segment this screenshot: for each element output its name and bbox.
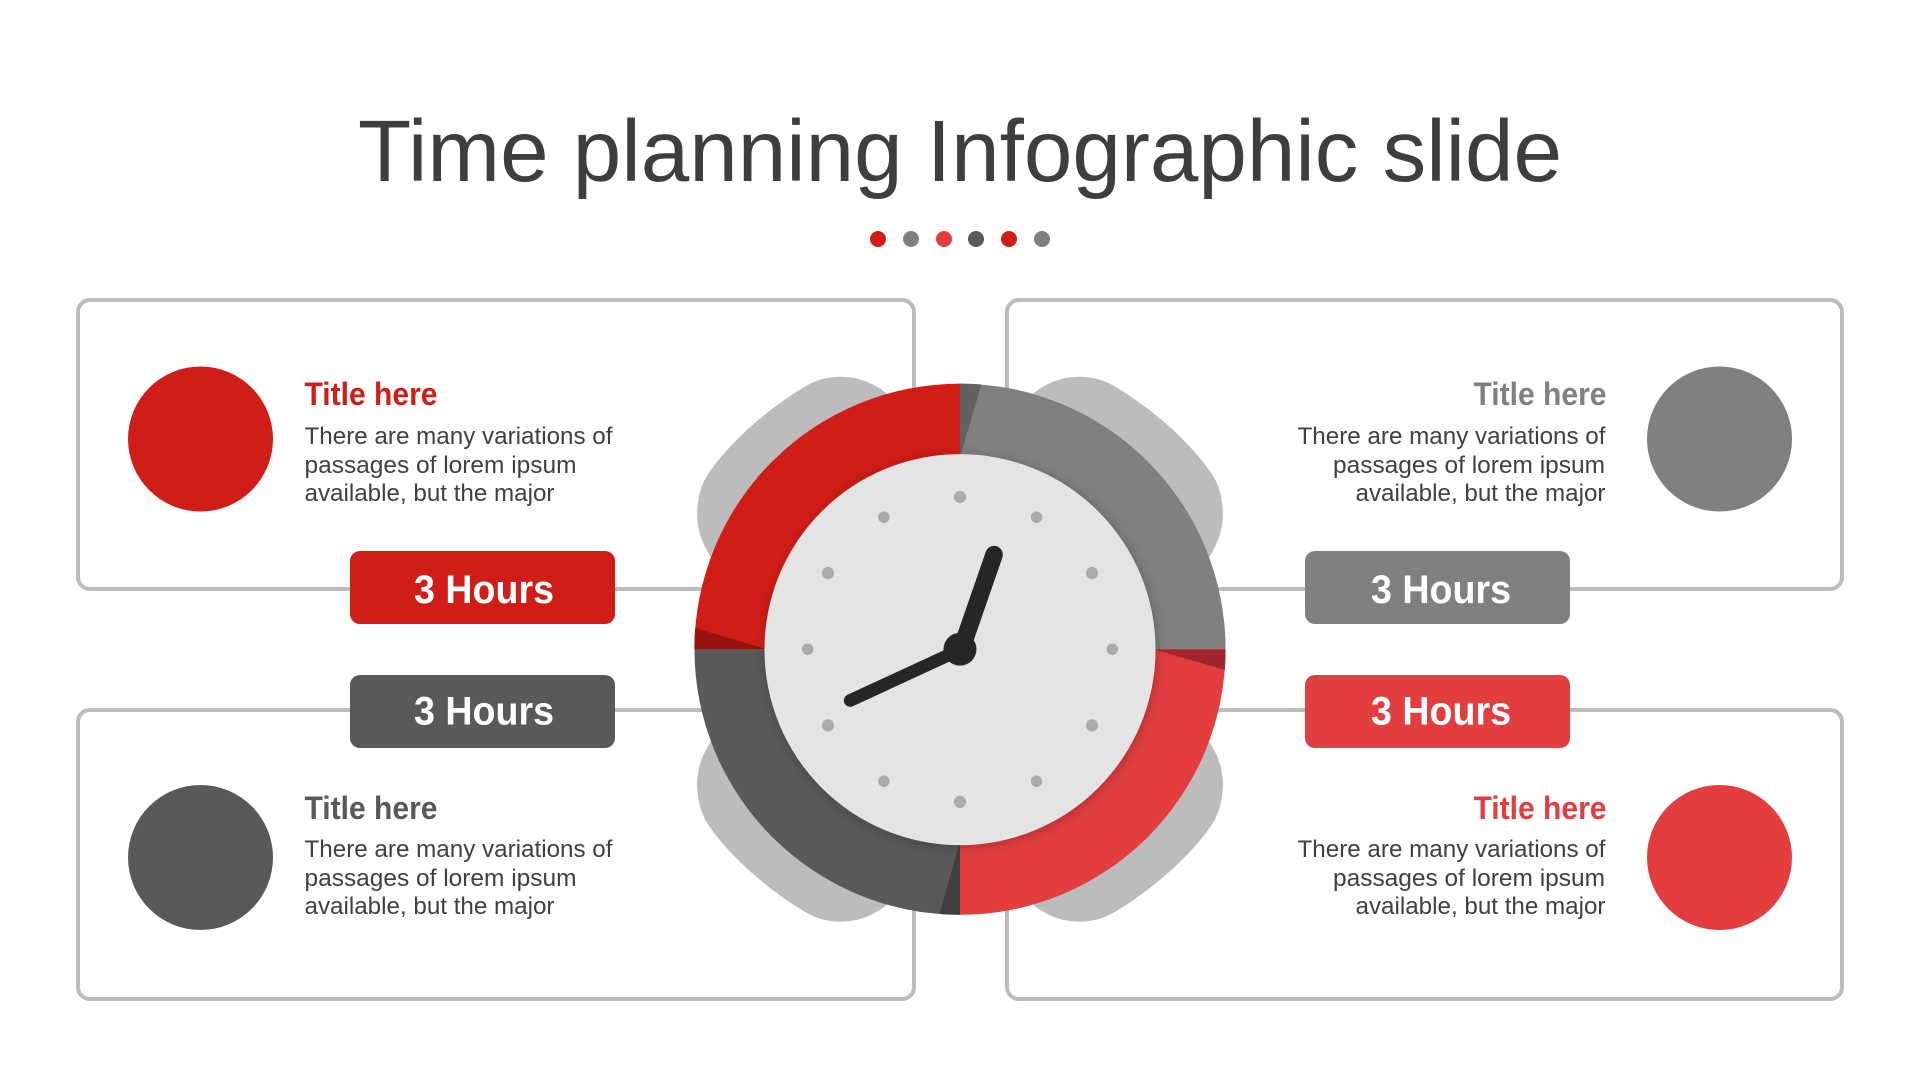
icon: top left circle xyxy=(128,366,273,512)
ring fold wedges xyxy=(694,384,1226,915)
badge: top right: 3 Hours xyxy=(1371,568,1511,612)
ring segment: light red, lower right xyxy=(960,649,1226,915)
icon: bottom right circle xyxy=(1647,785,1792,930)
top right text block xyxy=(1298,376,1606,507)
badge: top right xyxy=(1305,551,1570,624)
bottom right text block: passages of lorem ipsum xyxy=(1333,865,1605,892)
top right text block: There are many variations of xyxy=(1298,423,1606,450)
top right text block: passages of lorem ipsum xyxy=(1333,452,1605,479)
bottom right text block: Title here xyxy=(1474,790,1606,826)
panel: top right card xyxy=(1007,300,1842,589)
bottom right text block: available, but the major xyxy=(1356,893,1606,920)
badge: top left xyxy=(350,551,615,624)
panel: bottom right card xyxy=(1007,710,1842,999)
bottom left text block xyxy=(304,790,613,920)
ring segment: dark grey, lower left xyxy=(694,649,960,915)
ring segment: grey, upper right xyxy=(960,384,1226,649)
bottom left text block: There are many variations of xyxy=(304,836,613,863)
bottom left text block: available, but the major xyxy=(304,893,554,920)
title: Time planning Infographic slide xyxy=(358,103,1562,200)
top right text block: Title here xyxy=(1474,376,1606,412)
bottom right text block: There are many variations of xyxy=(1298,836,1606,863)
badge: bottom right: 3 Hours xyxy=(1371,690,1511,734)
clock bells: grey blobs xyxy=(697,377,1223,922)
top left text block: passages of lorem ipsum xyxy=(304,452,576,479)
panel: top left card xyxy=(78,300,914,589)
clock graphic xyxy=(694,377,1226,922)
badge: bottom left: 3 Hours xyxy=(414,690,554,734)
hour marks xyxy=(802,491,1118,808)
dot row xyxy=(870,231,1050,247)
badge: bottom right xyxy=(1305,675,1570,748)
top left text block: Title here xyxy=(304,376,438,412)
clock face xyxy=(764,454,1156,845)
panel: bottom left card xyxy=(78,710,914,999)
top left text block: available, but the major xyxy=(304,480,554,507)
badge: top left: 3 Hours xyxy=(414,568,554,612)
bottom right text block xyxy=(1298,790,1606,920)
bottom left text block: Title here xyxy=(304,790,438,826)
top left text block xyxy=(304,376,613,507)
ring segment: red, upper left xyxy=(694,384,960,649)
icon: top right circle xyxy=(1647,366,1792,512)
top right text block: available, but the major xyxy=(1356,480,1606,507)
bottom left text block: passages of lorem ipsum xyxy=(304,865,576,892)
top left text block: There are many variations of xyxy=(304,423,613,450)
clock hands xyxy=(850,555,994,701)
icon: bottom left circle xyxy=(128,785,273,930)
badge: bottom left xyxy=(350,675,615,748)
